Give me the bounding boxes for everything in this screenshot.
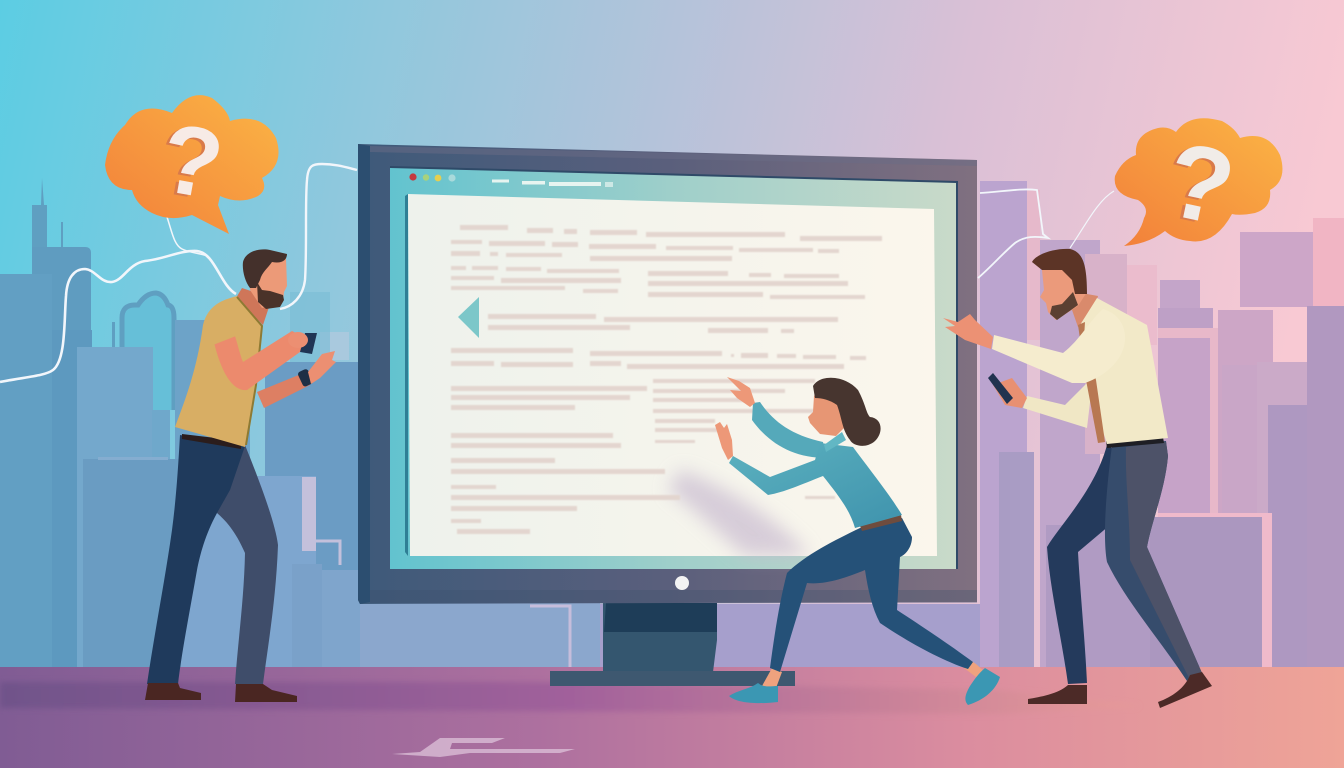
hair	[1032, 249, 1087, 294]
phone hand	[993, 378, 1027, 408]
belt	[860, 515, 902, 531]
speech bubble left	[105, 95, 279, 234]
near arm	[213, 331, 306, 390]
upper arm	[992, 309, 1125, 383]
shirt	[175, 296, 262, 447]
lower hand	[715, 422, 733, 460]
person: man left	[145, 249, 336, 702]
neck	[236, 288, 272, 325]
question mark right: ?	[1153, 121, 1241, 250]
shoes	[145, 683, 297, 702]
far hand	[308, 351, 336, 384]
far arm	[257, 372, 310, 408]
screen	[390, 167, 957, 569]
hair	[243, 249, 287, 288]
beard	[257, 282, 284, 309]
city skyline left	[0, 178, 980, 667]
neck	[1065, 290, 1098, 327]
city skyline right	[980, 181, 1344, 667]
face	[1040, 262, 1087, 320]
reaching hand	[943, 314, 993, 349]
speech bubble right	[1115, 118, 1282, 251]
face	[250, 258, 287, 308]
far arm	[752, 402, 826, 458]
ankles	[762, 668, 782, 688]
lower arm	[1023, 377, 1093, 428]
monitor stand	[550, 603, 795, 686]
power button	[675, 576, 689, 590]
shoes	[1028, 672, 1212, 708]
address bar	[492, 180, 613, 187]
trousers	[770, 518, 973, 672]
back arrow	[458, 297, 479, 338]
shirt	[1080, 298, 1168, 444]
person: woman centre	[715, 377, 1000, 705]
woman's shadow on page	[668, 470, 810, 556]
tie	[1078, 322, 1105, 443]
monitor	[358, 144, 977, 604]
window controls	[409, 173, 456, 182]
document page	[405, 194, 937, 556]
trousers	[1047, 437, 1202, 684]
torso and near arm	[729, 443, 902, 528]
person: man right	[943, 249, 1212, 708]
floor smudge	[392, 738, 575, 757]
connecting wires	[0, 164, 1114, 382]
question mark left: ?	[153, 102, 231, 220]
hair	[813, 378, 881, 446]
document text lines	[451, 225, 882, 534]
phone	[300, 333, 317, 354]
neck and face	[808, 392, 844, 436]
beard	[1050, 292, 1078, 320]
shoes	[729, 668, 1000, 705]
question mark right: ?	[1156, 120, 1244, 249]
trousers	[147, 434, 278, 684]
question mark left: ?	[149, 103, 228, 222]
floor	[0, 667, 1344, 768]
upper hand	[727, 377, 755, 407]
hand	[288, 332, 308, 348]
